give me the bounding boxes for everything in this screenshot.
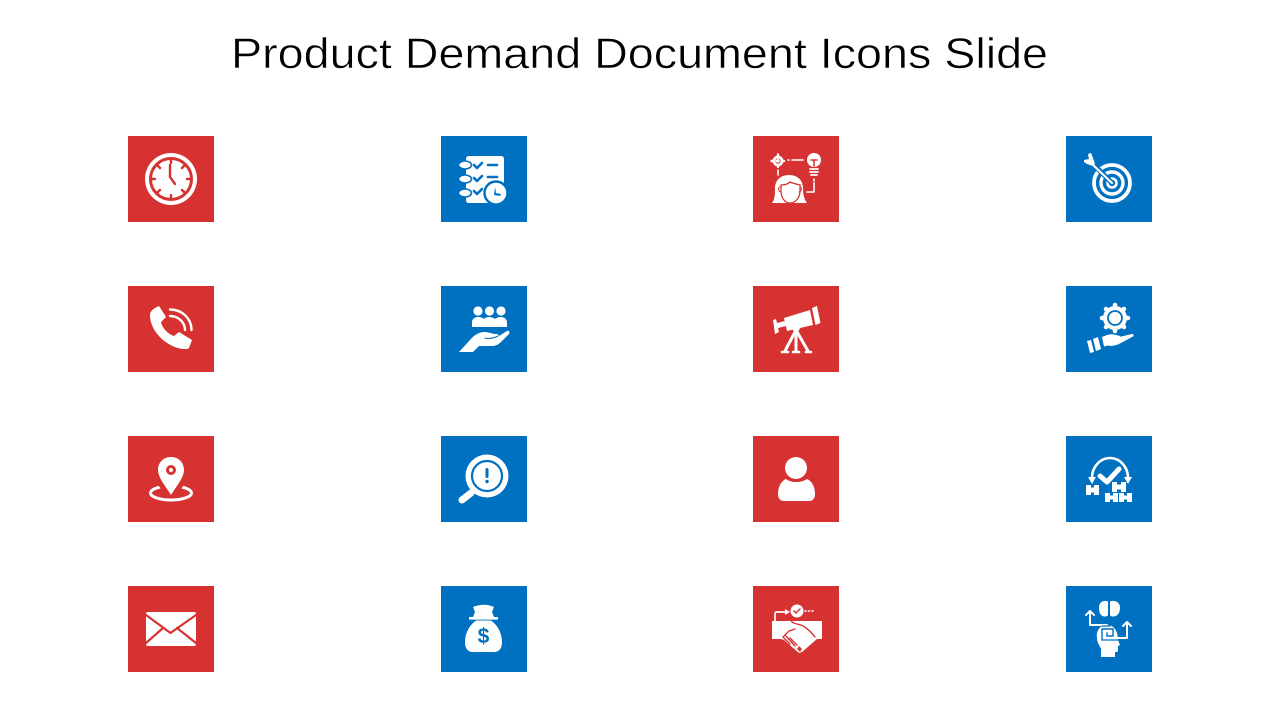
icon: person with gear and lightbulb — [753, 136, 839, 222]
icon: team on open hand — [441, 286, 527, 372]
icon: handshake with check — [753, 586, 839, 672]
icon: telescope — [753, 286, 839, 372]
icon: money bag — [441, 586, 527, 672]
icon: gear on hand — [1066, 286, 1152, 372]
icon: location pin — [128, 436, 214, 522]
icon: envelope — [128, 586, 214, 672]
title: Product Demand Document Icons Slide — [231, 31, 1048, 78]
icon: checklist with clock — [441, 136, 527, 222]
icon: target with arrow — [1066, 136, 1152, 222]
icon: approved boxes with check arc — [1066, 436, 1152, 522]
icon: clock — [128, 136, 214, 222]
icon: money bag: $ — [478, 625, 490, 648]
icon: user — [753, 436, 839, 522]
icon: phone call — [128, 286, 214, 372]
icon: brain and head with arrows — [1066, 586, 1152, 672]
icon: magnifier with exclamation — [441, 436, 527, 522]
